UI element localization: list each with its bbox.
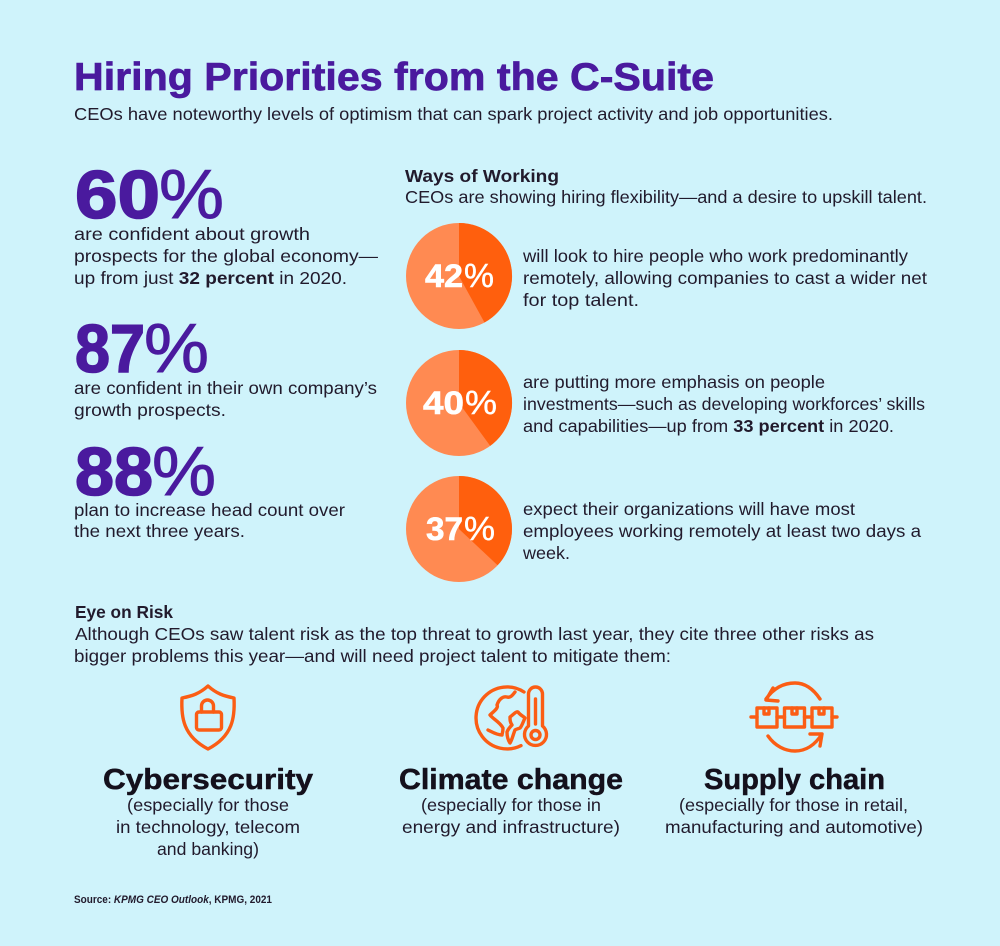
stat: 87 percent: growth prospects. — [74, 400, 226, 420]
stat: 60 percent: % — [159, 155, 224, 233]
text: 42 percent — [522, 246, 927, 310]
risk: cybersecurity: in technology, telecom — [116, 817, 300, 837]
stat: 87 percent: 87 — [75, 311, 145, 387]
stat: 88 percent — [74, 432, 345, 541]
stat: 60 percent: 60 — [75, 157, 160, 233]
stat: 87 percent: % — [144, 309, 209, 387]
text: 40 percent: are putting more emphasis on people — [523, 372, 825, 392]
pie chart: 40 percent — [406, 350, 512, 456]
stat: 88 percent: % — [152, 432, 216, 510]
section: eye on risk: Eye on Risk — [75, 602, 173, 622]
heading: ways of working — [405, 166, 927, 207]
icon: shield with padlock — [182, 686, 234, 749]
source note: Source: KPMG CEO Outlook, KPMG, 2021 — [74, 894, 272, 906]
subtitle: CEOs have noteworthy levels of optimism that can spark project activity and job opportunities. — [74, 104, 833, 124]
text: 40 percent: and capabilities—up from 33 percent in 2020. — [523, 416, 894, 436]
section: eye on risk: bigger problems this year—and will need project talent to mitigate them: — [74, 646, 671, 666]
text: 37 percent — [522, 499, 921, 563]
risk: cybersecurity — [103, 764, 313, 859]
stat: 87 percent — [74, 309, 377, 420]
risk: cybersecurity: (especially for those — [127, 795, 289, 815]
heading: ways of working: CEOs are showing hiring flexibility—and a desire to upskill talent. — [405, 187, 927, 207]
risk: cybersecurity: and banking) — [157, 839, 259, 859]
risk: supply chain: (especially for those in retail, — [679, 795, 908, 815]
title: Hiring Priorities from the C-Suite — [74, 56, 714, 99]
stat: 88 percent: plan to increase head count over — [74, 500, 345, 520]
risk: climate change — [399, 764, 623, 837]
risk: climate change: Climate change — [399, 764, 623, 796]
text: 42 percent: will look to hire people who work predominantly — [522, 246, 908, 266]
pie chart: 42 percent — [406, 223, 512, 329]
heading: ways of working: Ways of Working — [405, 166, 559, 186]
pie chart: 37 percent: 37 — [426, 511, 463, 547]
stat: 87 percent: are confident in their own company’s — [74, 378, 377, 398]
text: 37 percent: week. — [522, 543, 570, 563]
text: 42 percent: for top talent. — [523, 290, 639, 310]
risk: supply chain: manufacturing and automotive) — [665, 817, 923, 837]
pie chart: 42 percent: 42 — [425, 258, 463, 294]
text: 37 percent: employees working remotely at least two days a — [523, 521, 921, 541]
text: 40 percent — [523, 372, 925, 436]
text: 40 percent: investments—such as developing workforces’ skills — [523, 394, 925, 414]
pie chart: 40 percent: 40 — [423, 385, 464, 421]
icon: supply chain — [751, 683, 837, 751]
stat: 88 percent: 88 — [75, 434, 153, 510]
section: eye on risk: Although CEOs saw talent risk as the top threat to growth last year, they cite three other risks as — [75, 624, 874, 644]
text: 37 percent: expect their organizations will have most — [523, 499, 855, 519]
risk: cybersecurity: Cybersecurity — [103, 764, 313, 796]
icon: globe with thermometer — [476, 687, 546, 749]
stat: 60 percent — [74, 155, 379, 288]
stat: 60 percent: prospects for the global economy— — [74, 246, 379, 266]
pie chart: 37 percent: % — [464, 510, 495, 547]
risk: climate change: energy and infrastructure) — [402, 817, 620, 837]
pie chart: 37 percent — [406, 476, 512, 582]
stat: 60 percent: are confident about growth — [74, 224, 310, 244]
stat: 60 percent: up from just 32 percent in 2020. — [74, 268, 347, 288]
section: eye on risk — [74, 602, 874, 666]
risk: supply chain — [665, 764, 923, 837]
risk: climate change: (especially for those in — [421, 795, 601, 815]
stat: 88 percent: the next three years. — [74, 521, 245, 541]
text: 42 percent: remotely, allowing companies to cast a wider net — [523, 268, 927, 288]
risk: supply chain: Supply chain — [704, 764, 885, 796]
pie chart: 42 percent: % — [464, 257, 494, 294]
pie chart: 40 percent: % — [465, 384, 497, 421]
